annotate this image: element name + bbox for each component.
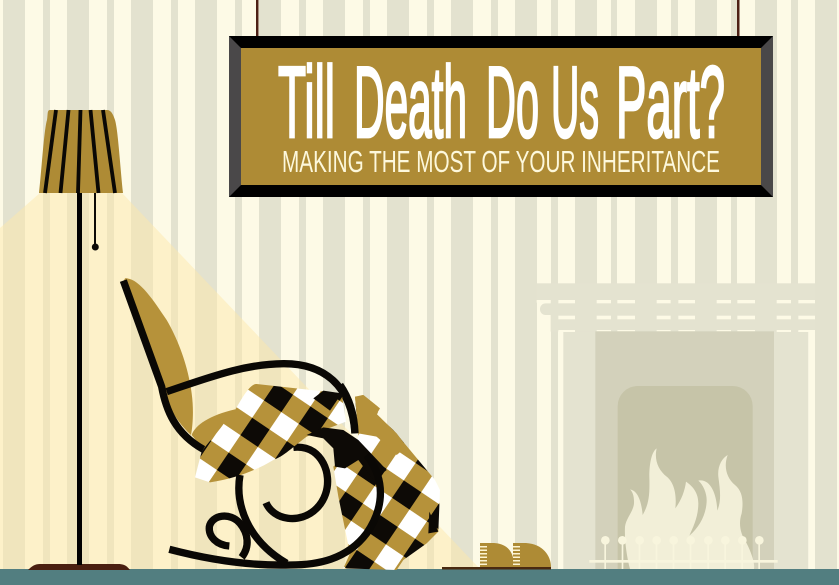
- slipper stitching: [480, 546, 520, 565]
- slipper soles: [442, 567, 551, 570]
- floor: [0, 569, 839, 585]
- flames: [625, 448, 754, 569]
- sign chains: [256, 0, 740, 36]
- blanket left: [195, 384, 346, 482]
- floor lamp: [28, 110, 130, 570]
- fireplace surround: [558, 331, 815, 569]
- fireplace: [537, 283, 815, 569]
- chair back frame: [123, 281, 203, 449]
- blanket right: [333, 395, 440, 570]
- blanket top gold fold: [355, 395, 407, 455]
- back cushion: [123, 278, 193, 435]
- firebox: [595, 331, 774, 569]
- slipper front: [513, 543, 551, 567]
- slipper rear: [480, 543, 514, 567]
- firebox arch: [618, 386, 753, 569]
- blanket fold black check: [313, 391, 342, 411]
- sign frame: [229, 36, 773, 197]
- title: Do: [486, 47, 539, 159]
- lamp base: [28, 564, 130, 570]
- seat cushion: [192, 409, 250, 453]
- lamp pole: [77, 193, 82, 565]
- slippers: [442, 543, 551, 570]
- lamp light cone: [0, 193, 480, 569]
- chair leg curve: [239, 475, 287, 563]
- title: Death: [354, 47, 467, 159]
- blanket tail: [428, 512, 438, 533]
- pull cord: [92, 193, 99, 250]
- title: Till: [278, 47, 335, 159]
- fire guard: [589, 536, 778, 569]
- front rocker frame: [169, 455, 380, 565]
- shade stripes: [45, 110, 115, 193]
- hanging sign: [229, 0, 773, 197]
- arm rest: [167, 364, 355, 433]
- mantel shelf: [537, 283, 815, 332]
- small scroll: [209, 516, 247, 557]
- black fold band: [307, 427, 387, 480]
- seat spiral: [266, 447, 328, 519]
- arm rest front: [340, 385, 355, 433]
- title: Us: [551, 47, 599, 159]
- mantel trim lines: [537, 300, 815, 332]
- lamp shade: [39, 110, 123, 193]
- rocking chair with blanket: [123, 278, 440, 570]
